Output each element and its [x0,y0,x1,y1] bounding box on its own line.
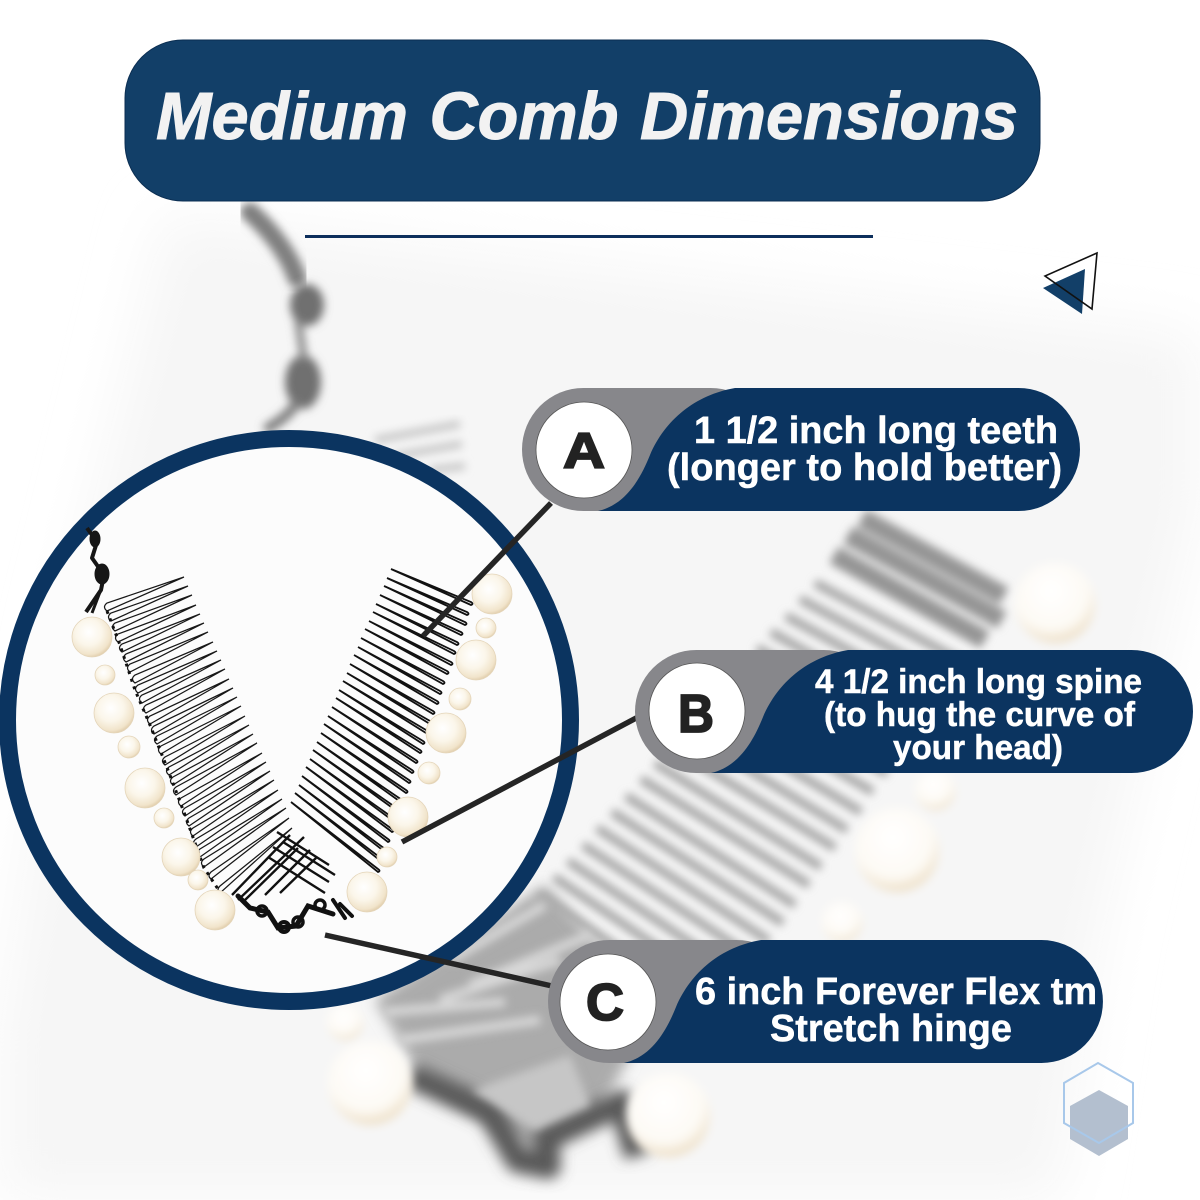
comb teeth, left arm [104,577,292,893]
callout C [548,940,1103,1063]
callout C text: Stretch hinge [770,1008,1012,1050]
callout A [522,388,1080,511]
leader line C [325,935,552,986]
leader line B [402,716,640,842]
pearls [72,574,512,930]
badge B [649,663,745,759]
magnified comb circle [8,438,570,1002]
badge C [560,954,656,1050]
badge A: A [563,423,605,479]
badge A [536,402,632,498]
comb teeth, right arm [291,569,472,872]
callout B text: 4 1/2 inch long spine [815,663,1142,701]
callout A text [667,410,1062,489]
leader line A [423,503,551,636]
title text: Medium Comb Dimensions [156,79,1018,154]
callout A text: (longer to hold better) [667,447,1062,489]
callout B [635,650,1193,773]
callout B text: (to hug the curve of [824,696,1136,734]
callout A text: 1 1/2 inch long teeth [694,410,1058,452]
stretch hinge chain [238,896,352,932]
crossing teeth at comb hinge [232,832,335,900]
callout B text: your head) [893,729,1063,767]
title banner [125,40,1040,201]
badge C: C [586,974,624,1032]
elastic cord with knots [86,528,109,613]
badge B: B [678,684,714,744]
divider line under title [305,235,873,238]
callout C text: 6 inch Forever Flex tm [695,971,1097,1013]
twisted comb spine, left arm [107,611,222,895]
icon: overlapping triangles [1043,253,1097,314]
callout B text [815,663,1142,767]
callout C text [695,971,1097,1050]
icon: hexagons [1064,1063,1133,1156]
